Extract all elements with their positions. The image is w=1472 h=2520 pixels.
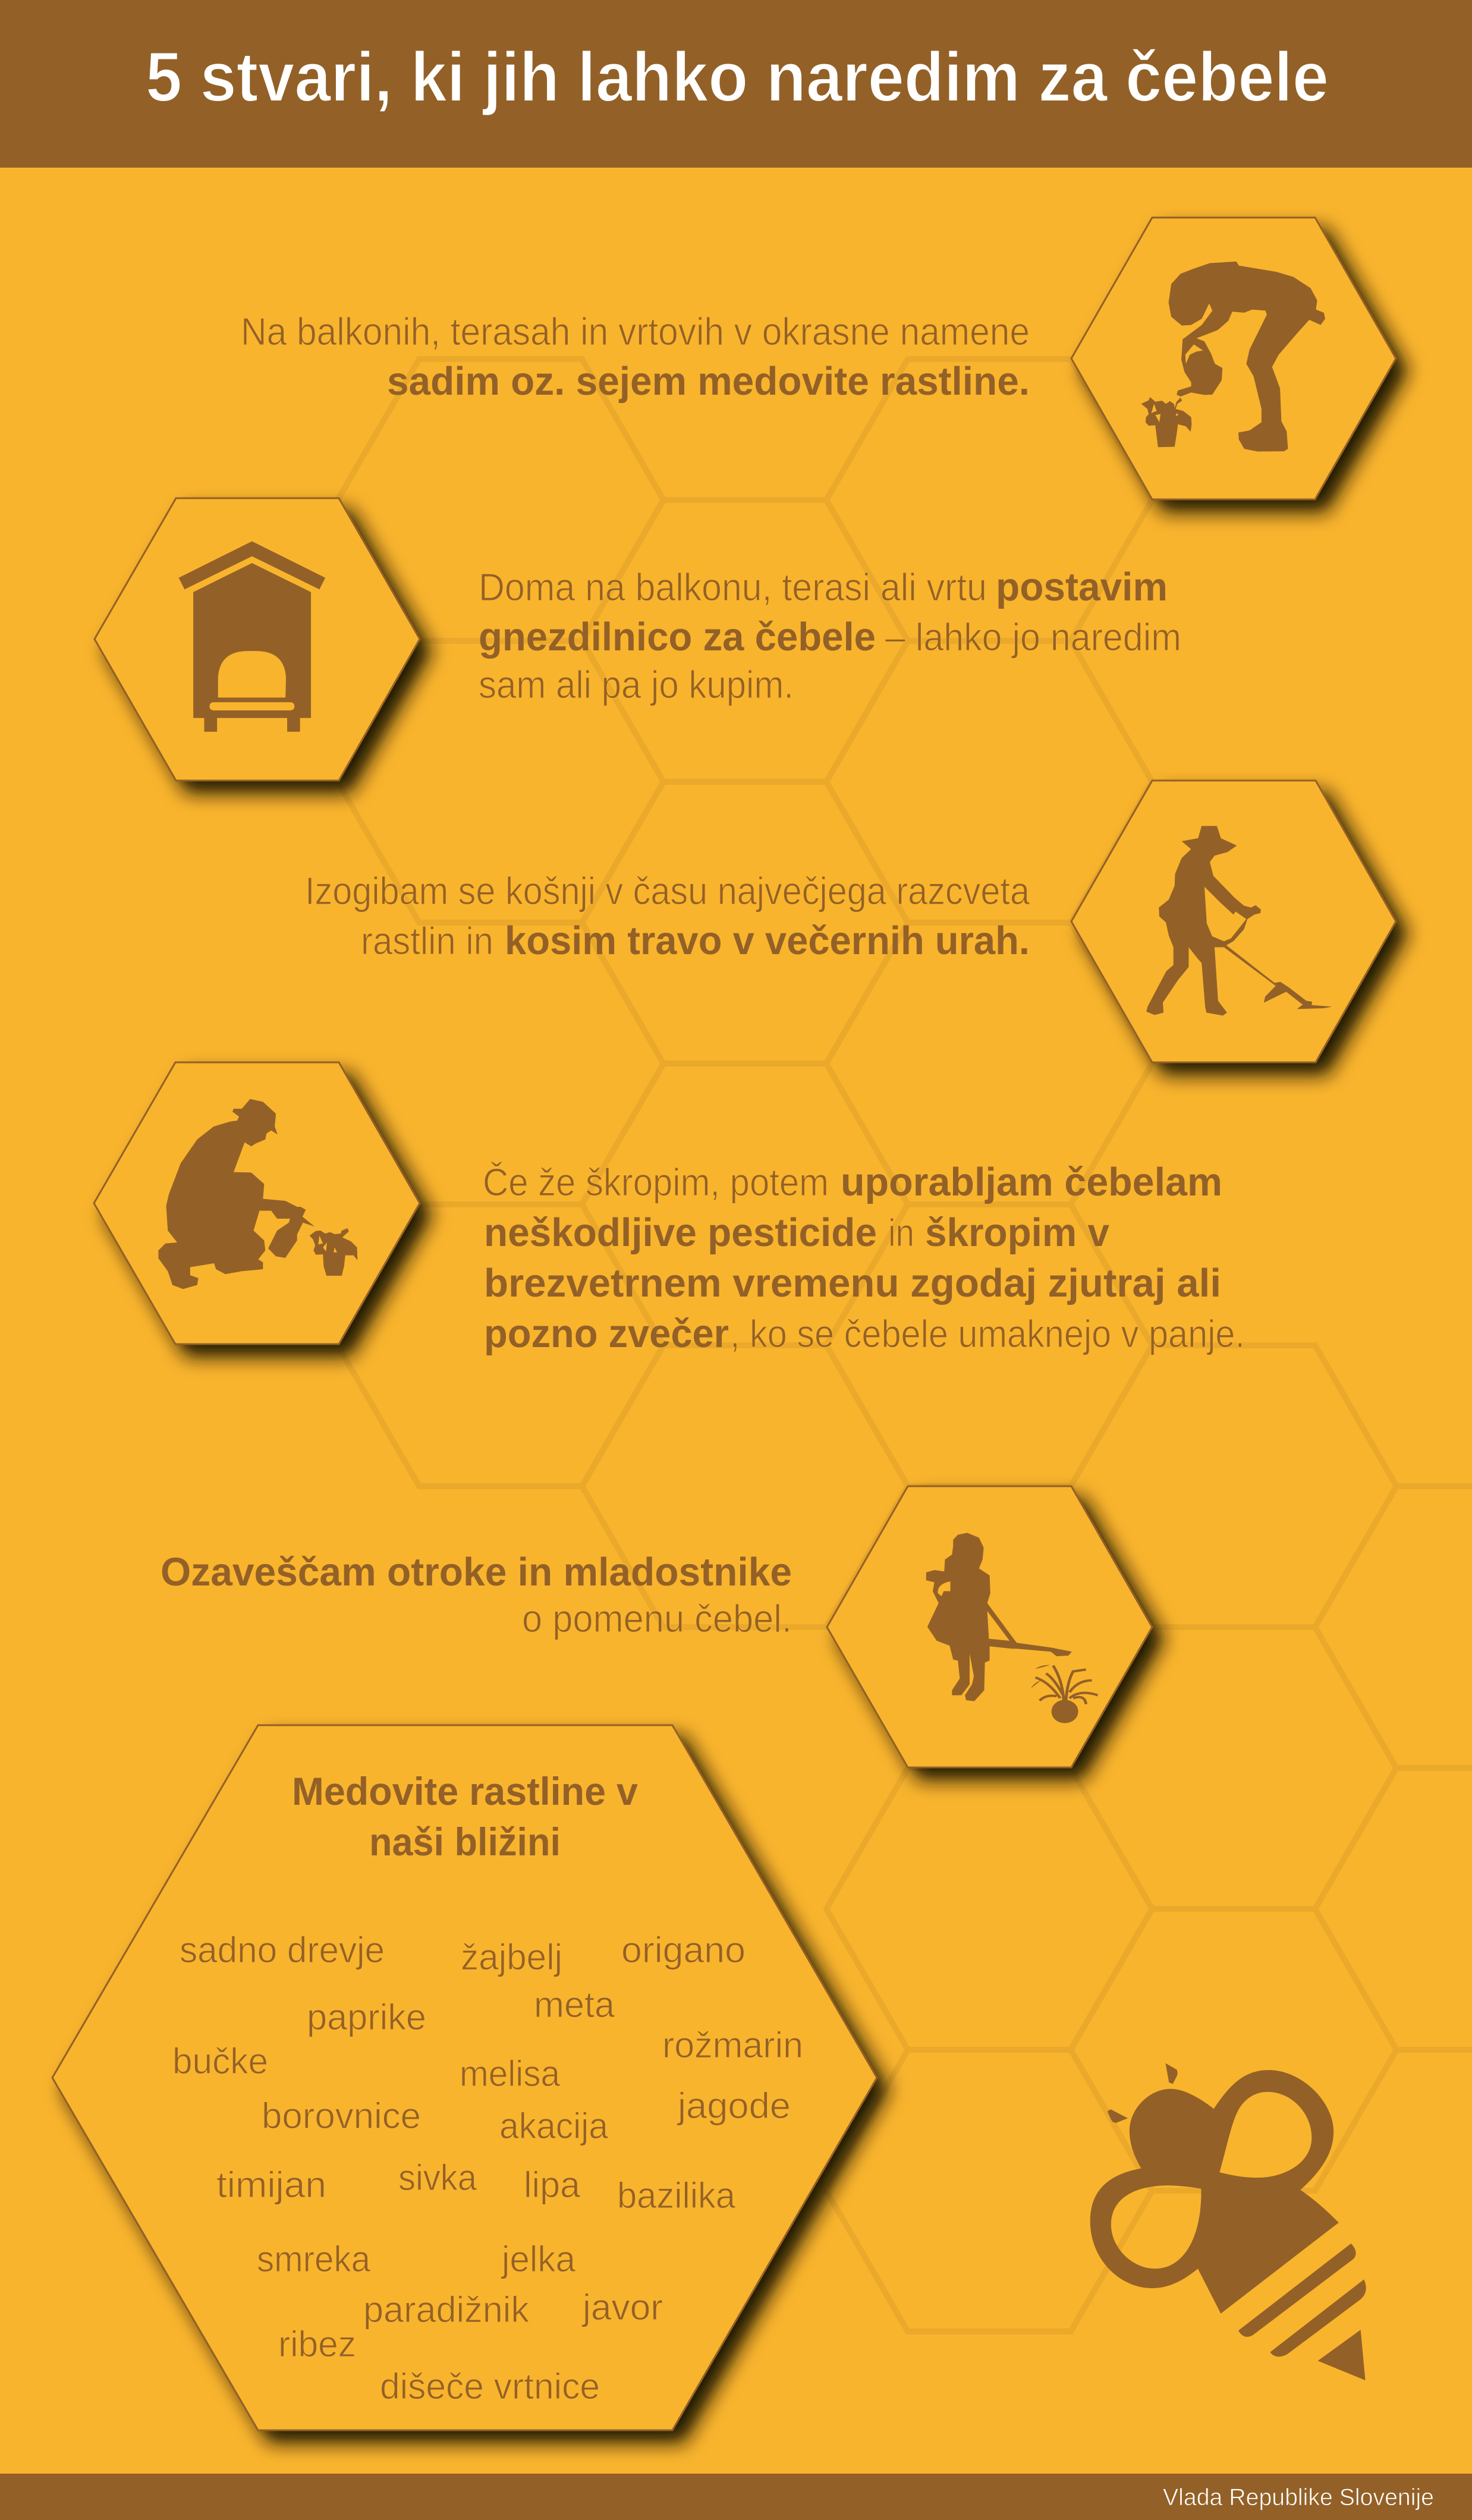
word cloud: plants: bučke bbox=[172, 2041, 268, 2081]
text block 2 bbox=[479, 565, 1181, 706]
icon: bee house bbox=[179, 542, 325, 732]
word cloud: plants: sivka bbox=[398, 2157, 477, 2198]
icon: woman with watering can bbox=[1141, 262, 1325, 451]
hexagon: mowing person bbox=[1071, 781, 1396, 1062]
text block 4: brezvetrnem vremenu zgodaj zjutraj ali bbox=[484, 1261, 1221, 1305]
text block 2: Doma na balkonu, terasi ali vrtu bbox=[479, 565, 987, 609]
hexagon: bee house bbox=[95, 498, 420, 781]
heading: honey plants bbox=[292, 1769, 638, 1864]
text block 2: sam ali pa jo kupim. bbox=[479, 663, 794, 706]
word cloud: plants: smreka bbox=[257, 2239, 370, 2279]
word cloud: plants: žajbelj bbox=[461, 1937, 562, 1977]
icon: child with tool and plant bbox=[926, 1533, 1097, 1723]
text block 2: postavim bbox=[996, 565, 1168, 609]
text block 2: gnezdilnico za čebele bbox=[479, 615, 876, 659]
text block 4 bbox=[483, 1160, 1245, 1356]
word cloud: plants: rožmarin bbox=[662, 2025, 803, 2065]
text block 4: uporabljam čebelam bbox=[841, 1160, 1222, 1204]
icon: person spraying plant bbox=[158, 1099, 357, 1289]
hexagon: child bbox=[827, 1486, 1152, 1767]
title: 5 stvari, ki jih lahko naredim za čebele bbox=[146, 38, 1329, 117]
hexagon: gardener watering plant bbox=[1071, 218, 1396, 499]
word cloud: plants: paradižnik bbox=[363, 2289, 529, 2330]
word cloud: plants: borovnice bbox=[262, 2096, 421, 2136]
header bar bbox=[0, 0, 1472, 168]
word cloud: plants: jelka bbox=[501, 2239, 575, 2279]
text block 4: , ko se čebele umaknejo v panje. bbox=[730, 1312, 1245, 1355]
honeycomb pattern bbox=[338, 359, 1472, 2332]
word cloud: plants: melisa bbox=[460, 2053, 560, 2094]
word cloud: plants: origano bbox=[621, 1930, 746, 1970]
word cloud: plants: sadno drevje bbox=[180, 1930, 385, 1970]
word cloud: plants: akacija bbox=[499, 2106, 608, 2146]
icon: bee bbox=[1090, 2063, 1366, 2380]
word cloud: plants bbox=[172, 1930, 803, 2406]
text block 4: pozno zvečer bbox=[484, 1311, 729, 1356]
heading: honey plants: naši bližini bbox=[369, 1820, 561, 1864]
text block 5 bbox=[161, 1550, 792, 1640]
footer bar bbox=[0, 2474, 1472, 2520]
word cloud: plants: dišeče vrtnice bbox=[380, 2366, 600, 2406]
text block 1: sadim oz. sejem medovite rastline. bbox=[387, 359, 1030, 404]
text block 4: in bbox=[888, 1211, 914, 1254]
text block 5: Ozaveščam otroke in mladostnike bbox=[161, 1550, 792, 1594]
text block 1 bbox=[241, 310, 1030, 404]
hexagon: spraying person bbox=[94, 1062, 420, 1344]
text block 1: Na balkonih, terasah in vrtovih v okrasne namene bbox=[241, 310, 1030, 353]
text block 4: škropim v bbox=[925, 1210, 1109, 1255]
word cloud: plants: jagode bbox=[677, 2085, 791, 2126]
hexagon: honey plants list bbox=[52, 1725, 877, 2430]
text block 3: Izogibam se košnji v času največjega razcveta bbox=[305, 869, 1030, 913]
text block 3: kosim travo v večernih urah. bbox=[505, 918, 1030, 963]
word cloud: plants: paprike bbox=[307, 1997, 426, 2037]
footer credit: Vlada Republike Slovenije bbox=[1163, 2484, 1434, 2510]
word cloud: plants: bazilika bbox=[617, 2175, 735, 2216]
heading: honey plants: Medovite rastline v bbox=[292, 1769, 638, 1813]
text block 4: Če že škropim, potem bbox=[483, 1160, 829, 1204]
word cloud: plants: javor bbox=[581, 2287, 663, 2327]
text block 2: – lahko jo naredim bbox=[885, 615, 1181, 659]
word cloud: plants: timijan bbox=[216, 2165, 326, 2205]
text block 3 bbox=[305, 869, 1030, 963]
word cloud: plants: ribez bbox=[278, 2324, 356, 2364]
text block 3: rastlin in bbox=[361, 919, 493, 962]
text block 5: o pomenu čebel. bbox=[522, 1597, 792, 1640]
icon: person with grass trimmer bbox=[1146, 826, 1332, 1015]
word cloud: plants: lipa bbox=[524, 2165, 580, 2205]
text block 4: neškodljive pesticide bbox=[484, 1210, 877, 1255]
word cloud: plants: meta bbox=[534, 1984, 615, 2025]
